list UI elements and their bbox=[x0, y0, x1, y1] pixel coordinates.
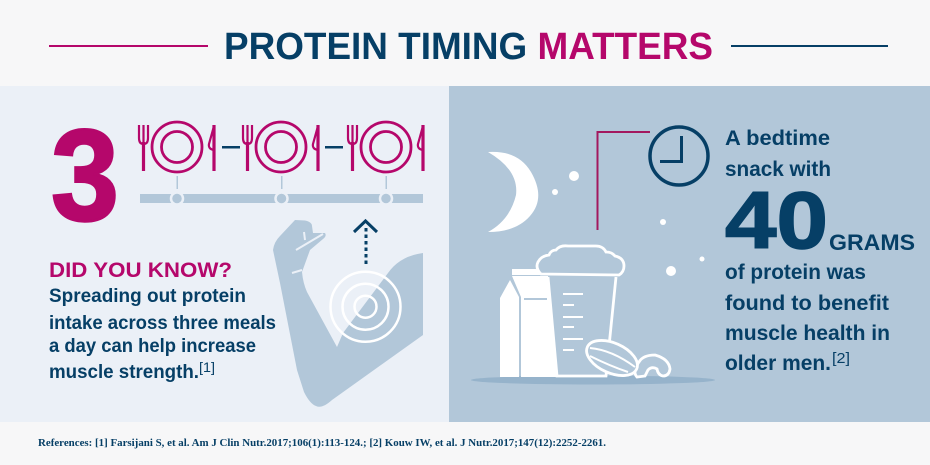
big number 40 grams bbox=[725, 176, 915, 266]
shaker cup bbox=[548, 277, 616, 376]
connector line bbox=[598, 132, 650, 230]
text block: bedtime snack: of protein was bbox=[725, 261, 866, 284]
big number 40 grams: GRAMS bbox=[829, 230, 915, 255]
text block: protein spreading: intake across three meals bbox=[49, 312, 276, 334]
panel: meals bbox=[0, 86, 449, 422]
text block: protein spreading: Spreading out protein bbox=[49, 285, 246, 307]
icon: three place settings bbox=[139, 122, 423, 172]
text block: protein spreading: [1] bbox=[199, 360, 215, 375]
text block: protein spreading: a day can help increase bbox=[49, 335, 256, 357]
text block: bedtime snack: A bedtime bbox=[725, 127, 830, 150]
panel: bedtime snack bbox=[449, 86, 930, 422]
text block: bedtime snack: snack with bbox=[725, 158, 831, 181]
header band bbox=[0, 0, 930, 86]
stars bbox=[552, 171, 704, 276]
arrow: upward dotted bbox=[354, 221, 377, 266]
icon: clock bbox=[650, 127, 708, 185]
text block: protein spreading bbox=[49, 285, 276, 383]
icon: milk carton, shaker and nuts bbox=[471, 246, 715, 384]
heading: did you know: DID YOU KNOW? bbox=[49, 259, 232, 282]
ground shadow bbox=[471, 376, 715, 384]
text block: bedtime snack: [2] bbox=[832, 351, 850, 367]
measure marks bbox=[563, 293, 583, 351]
text block: bedtime snack: found to benefit bbox=[725, 292, 889, 315]
nuts bbox=[635, 355, 670, 377]
big number 3: 3 bbox=[51, 102, 119, 248]
big number 40 grams: 40 bbox=[725, 176, 828, 266]
meal timeline bbox=[140, 176, 423, 204]
icon: moon bbox=[488, 152, 538, 232]
icon: flexed arm with target bbox=[273, 220, 423, 407]
text block: protein spreading: muscle strength. bbox=[49, 361, 199, 383]
text block: bedtime snack: older men. bbox=[725, 352, 831, 375]
milk carton bbox=[500, 276, 557, 377]
references: References: [1] Farsijani S, et al. Am J Clin Nutr.2017;106(1):113-124.; [2] Kouw IW, et al. J Nutr.2017;147(12):2252-2261. bbox=[38, 437, 606, 449]
text block: bedtime snack: muscle health in bbox=[725, 322, 890, 345]
text block: bedtime snack bbox=[725, 127, 915, 375]
title: PROTEIN TIMING MATTERS bbox=[224, 26, 713, 68]
